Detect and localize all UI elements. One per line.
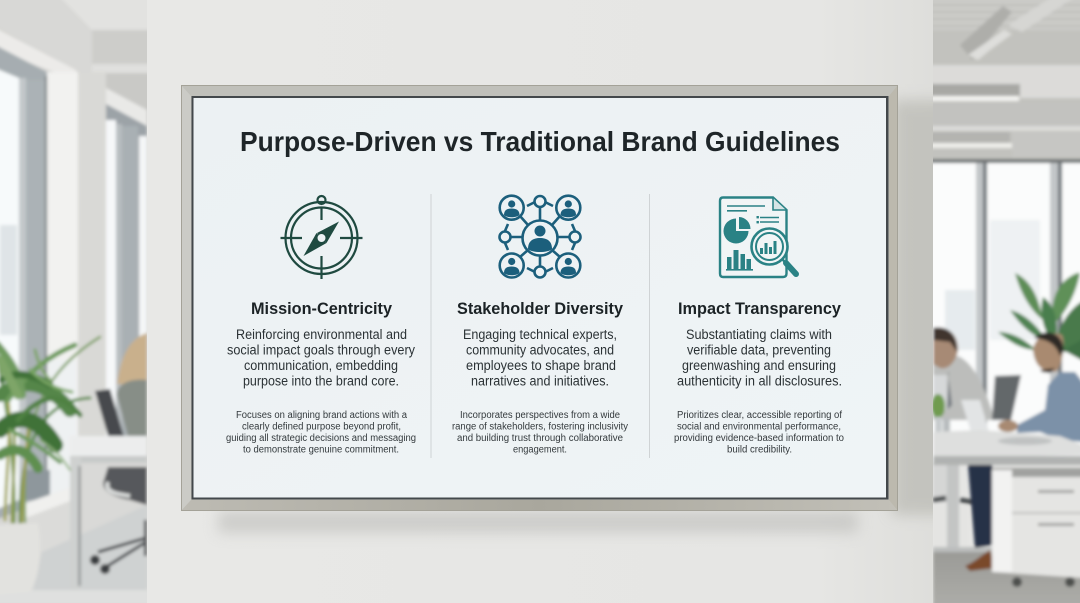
text: impact main: authenticity in all disclosures. [677,374,842,388]
heading: impact transparency: Impact Transparency [678,299,842,318]
text: stakeholder detail: engagement. [513,444,567,456]
text: stakeholder detail: and building trust through collaborative [457,433,623,444]
text: impact detail: build credibility. [727,444,792,456]
text: impact main [677,327,842,388]
text: stakeholder main: community advocates, and [466,342,614,358]
text: mission main [227,327,415,388]
text: impact detail: Prioritizes clear, accessible reporting of [677,410,842,421]
title: Purpose-Driven vs Traditional Brand Guidelines [240,126,840,157]
text: stakeholder main: Engaging technical experts, [463,327,617,342]
background: right office scene [930,0,1080,603]
text: mission detail: to demonstrate genuine commitment. [243,444,399,456]
text: impact detail [674,410,844,456]
icon: stakeholder network [500,196,580,278]
text: mission main: social impact goals through every [227,342,415,358]
display frame [181,85,898,511]
text: stakeholder detail: range of stakeholders, fostering inclusivity [452,422,628,432]
panel: mission-centricity [226,196,416,456]
divider right [648,194,650,458]
text: impact main: Substantiating claims with [686,327,832,342]
text: stakeholder main: narratives and initiatives. [471,374,609,388]
text: mission detail: Focuses on aligning brand actions with a [236,410,407,421]
heading: stakeholder diversity: Stakeholder Diversity [457,299,624,318]
text: impact detail: social and environmental performance, [677,422,841,432]
text: stakeholder detail: Incorporates perspectives from a wide [460,410,620,421]
heading: mission-centricity: Mission-Centricity [251,299,393,318]
text: stakeholder main [463,327,617,388]
text: mission detail: guiding all strategic decisions and messaging [226,433,416,444]
text: impact main: verifiable data, preventing [687,342,831,358]
background: wall [147,0,952,603]
background: left office scene [0,0,152,603]
panel: stakeholder diversity [452,196,628,455]
icon: compass [280,196,362,279]
panel: impact transparency [674,198,844,456]
divider left [430,194,432,458]
text: impact main: greenwashing and ensuring [682,358,836,373]
text: impact detail: providing evidence-based information to [674,433,844,444]
text: stakeholder main: employees to shape brand [466,358,616,373]
icon: report with magnifier [720,198,796,277]
text: mission detail [226,410,416,456]
text: mission main: purpose into the brand core. [243,374,399,388]
text: mission main: communication, embedding [244,358,398,373]
text: mission main: Reinforcing environmental and [236,327,407,342]
text: mission detail: clearly defined purpose beyond profit, [242,422,401,432]
text: stakeholder detail [452,410,628,456]
